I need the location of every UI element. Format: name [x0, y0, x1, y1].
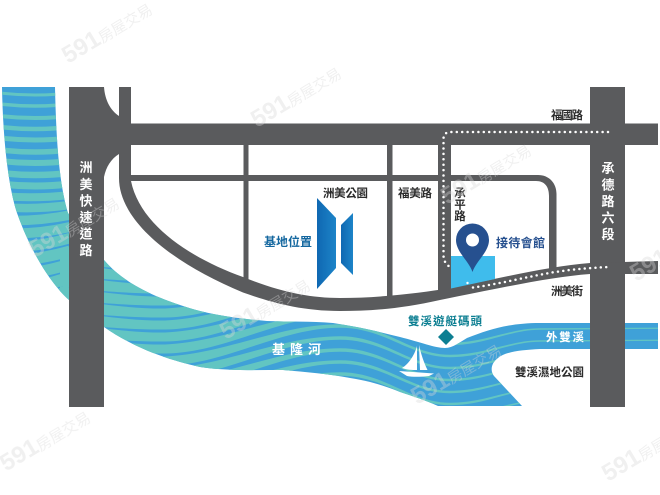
road label: 洲美快速道路: 路 — [79, 243, 93, 258]
road label: 承德路六段: 段 — [601, 227, 615, 242]
watermarks: 591房屋交易 — [24, 188, 124, 263]
dotted route — [444, 132, 608, 288]
road label: 承德路六段: 承 — [601, 161, 615, 176]
label: 雙溪遊艇碼頭: 雙溪遊艇碼頭 — [408, 314, 482, 328]
road label: 洲美快速道路: 快 — [79, 194, 93, 208]
road label: 洲美快速道路: 速 — [79, 210, 93, 225]
label: 接待會館: 接待會館 — [496, 235, 545, 250]
label: 外雙溪: 外雙溪 — [546, 330, 584, 344]
icon: site logo — [317, 198, 353, 289]
road: 承德路六段 — [590, 87, 625, 407]
road: 福美路 — [387, 144, 392, 300]
road label: 承平路: 承 — [454, 188, 466, 200]
road label: 承平路: 平 — [454, 198, 466, 212]
road: short connector — [104, 87, 131, 125]
label: 雙溪濕地公園: 雙溪濕地公園 — [515, 365, 584, 379]
road label: 洲美快速道路: 美 — [79, 177, 93, 192]
road: street 1 — [244, 144, 248, 281]
label: 基地位置: 基地位置 — [264, 234, 312, 249]
road: fillet junction — [104, 140, 119, 177]
road: 洲美快速道路 — [69, 87, 104, 407]
icon: diamond marker — [438, 329, 454, 345]
watermarks: 591房屋交易 — [215, 270, 315, 345]
label: 基隆河: 基隆河 — [272, 342, 321, 357]
road label: 洲美街: 洲美街 — [551, 284, 584, 298]
road label: 洲美快速道路: 洲 — [79, 160, 93, 175]
river: 基隆河 — [0, 80, 660, 426]
watermarks: 591房屋交易 — [57, 0, 157, 69]
road label: 洲美快速道路: 道 — [79, 226, 93, 242]
road: 福國路 — [100, 124, 658, 145]
road: 承平路 — [438, 144, 451, 296]
road label: 承平路: 路 — [454, 209, 466, 223]
road label: 承德路六段: 路 — [601, 194, 615, 209]
label: 洲美公園: 洲美公園 — [323, 186, 368, 200]
watermarks: 591房屋交易 — [406, 335, 506, 410]
roads — [69, 87, 658, 407]
road: inner street — [131, 175, 556, 270]
road label: 承德路六段: 六 — [601, 210, 615, 226]
road label: 福國路: 福國路 — [551, 108, 584, 122]
watermarks: 591房屋交易 — [246, 58, 346, 133]
road label: 承德路六段: 德 — [601, 178, 615, 192]
road label: 福美路: 福美路 — [398, 186, 432, 200]
icon: location pin — [456, 224, 489, 272]
reception building block — [451, 256, 495, 288]
road: 洲美街 curve — [119, 143, 658, 311]
icon: sailboat — [399, 345, 434, 377]
watermarks: 591房屋交易 — [436, 135, 536, 210]
